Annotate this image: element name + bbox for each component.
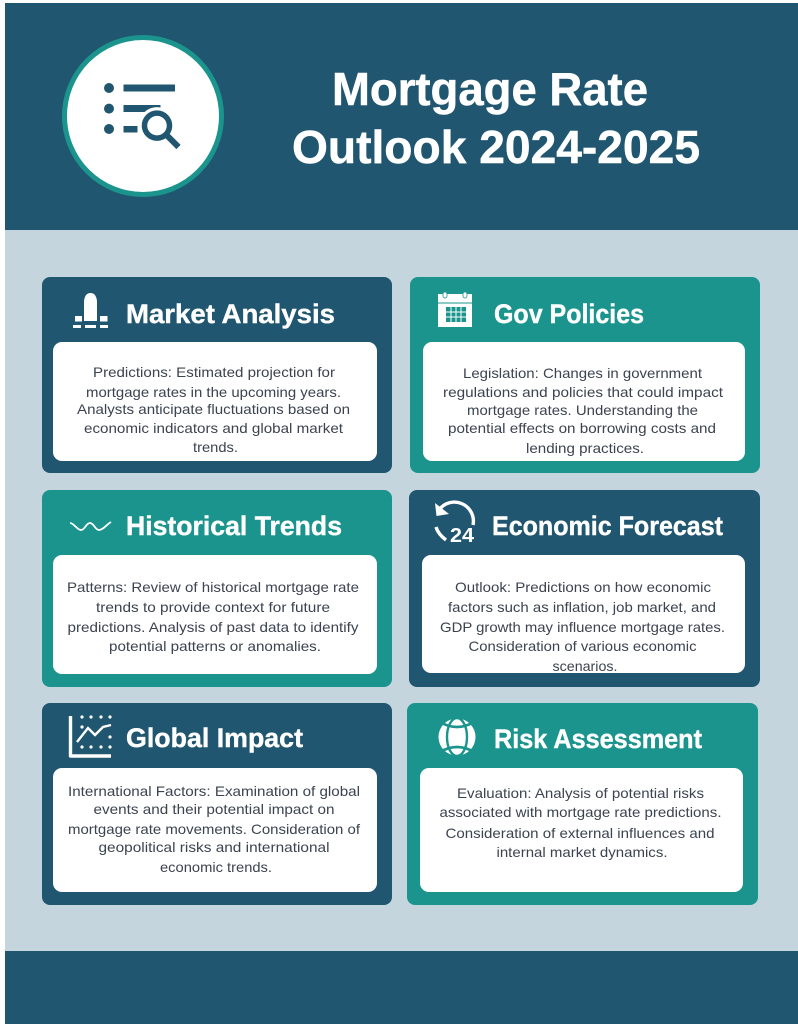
text: historical trends: predictions. Analysis of past data to identify [68,619,358,635]
heading: economic forecast: Economic Forecast [492,511,723,541]
text: gov policies: mortgage rates. Understanding the [467,402,698,418]
text: economic forecast: GDP growth may influence mortgage rates. [440,619,725,635]
text: gov policies: potential effects on borrowing costs and [448,420,716,436]
text: global impact: events and their potential impact on [94,801,334,817]
text: economic forecast: Consideration of various economic [468,638,696,654]
text: risk assessment: Consideration of external influences and [446,825,714,841]
text: gov policies [443,365,723,456]
panel: global impact [42,703,392,905]
panel: market analysis [42,277,392,473]
title [292,63,700,173]
text: market analysis: mortgage rates in the upcoming years. [86,384,341,400]
text: gov policies: Legislation: Changes in government [463,365,702,381]
icon: list search in circle [64,38,222,194]
text: historical trends: Patterns: Review of historical mortgage rate [67,579,359,595]
text: historical trends: trends to provide context for future [96,599,330,615]
text: global impact [68,783,360,875]
panel: gov policies [410,277,760,473]
header band [5,3,798,230]
text: market analysis: economic indicators and global market [84,420,343,436]
title: Mortgage Rate [332,63,648,115]
heading: gov policies: Gov Policies [494,299,644,329]
text: economic forecast: factors such as inflation, job market, and [448,599,716,615]
text: historical trends: potential patterns or anomalies. [109,638,321,654]
icon: 24 hour refresh [435,502,475,547]
text: gov policies: regulations and policies that could impact [443,384,723,400]
icon: bullet chart [73,293,108,328]
text: market analysis: Analysts anticipate fluctuations based on [77,401,350,417]
icon: wave [70,522,111,530]
text: economic forecast [440,579,725,674]
text: market analysis [77,364,350,455]
icon: line chart [70,715,112,756]
text: risk assessment [440,785,722,860]
text: risk assessment: internal market dynamics. [496,844,668,860]
panel: risk assessment [407,703,758,905]
text: economic forecast: Outlook: Predictions on how economic [455,579,711,595]
heading: global impact: Global Impact [126,723,303,753]
text: economic forecast: scenarios. [552,658,618,674]
panel: economic forecast [409,490,760,687]
text: risk assessment: Evaluation: Analysis of potential risks [457,785,704,801]
text: global impact: International Factors: Examination of global [68,783,360,799]
panel: historical trends [42,490,392,687]
text: market analysis: Predictions: Estimated projection for [93,364,335,380]
text: risk assessment: associated with mortgage rate predictions. [440,804,722,820]
heading: historical trends: Historical Trends [126,511,342,541]
icon: globe [438,718,476,756]
heading: market analysis: Market Analysis [126,299,335,329]
title: Outlook 2024-2025 [292,121,700,173]
text: global impact: economic trends. [160,859,272,875]
text: global impact: mortgage rate movements. Consideration of [68,821,360,837]
icon: calendar [438,292,472,327]
text: gov policies: lending practices. [526,440,644,456]
text: market analysis: trends. [193,439,238,455]
text: global impact: geopolitical risks and international [98,839,330,855]
heading: risk assessment: Risk Assessment [494,724,702,754]
text: historical trends [67,579,359,654]
icon: 24 hour refresh: 24 [450,525,475,547]
footer band [5,951,798,1024]
